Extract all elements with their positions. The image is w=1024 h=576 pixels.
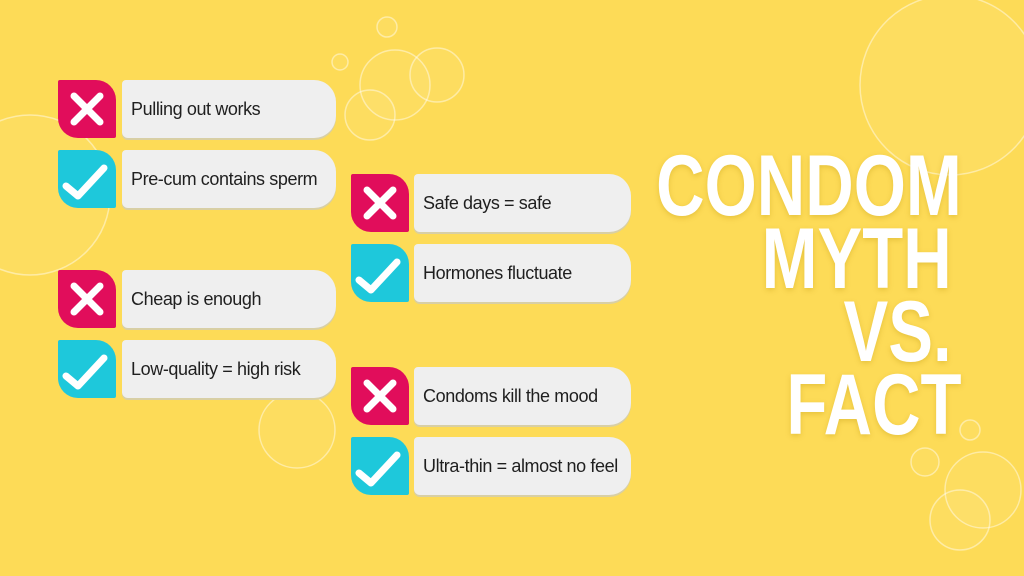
- card: myth: [414, 367, 631, 425]
- title: MYTH: [762, 211, 952, 307]
- group 1: [58, 80, 336, 210]
- title: VS.: [844, 284, 952, 380]
- title: CONDOM: [656, 138, 962, 234]
- card: fact: [414, 244, 631, 302]
- icon: cross: [351, 367, 409, 425]
- card: myth: Pulling out works: [131, 99, 260, 119]
- group 2: [58, 270, 336, 400]
- group 3: [351, 174, 631, 304]
- card: myth: Condoms kill the mood: [423, 386, 598, 406]
- title: FACT: [787, 357, 962, 453]
- icon: cross: [351, 174, 409, 232]
- icon: cross: [58, 80, 116, 138]
- card: fact: [122, 150, 336, 208]
- icon: cross: [58, 270, 116, 328]
- icon: check: [351, 244, 409, 302]
- card: myth: Safe days = safe: [423, 193, 551, 213]
- card: myth: Cheap is enough: [131, 289, 261, 309]
- icon: check: [58, 150, 116, 208]
- card: fact: [122, 340, 336, 398]
- card: fact: Hormones fluctuate: [423, 263, 572, 283]
- card: fact: Low-quality = high risk: [131, 359, 300, 379]
- title: [656, 138, 962, 453]
- card: fact: Pre-cum contains sperm: [131, 169, 317, 189]
- group 4: [351, 367, 631, 497]
- card: fact: Ultra-thin = almost no feel: [423, 456, 618, 476]
- card: myth: [122, 270, 336, 328]
- card: fact: [414, 437, 631, 495]
- card: myth: [414, 174, 631, 232]
- icon: check: [58, 340, 116, 398]
- card: myth: [122, 80, 336, 138]
- icon: check: [351, 437, 409, 495]
